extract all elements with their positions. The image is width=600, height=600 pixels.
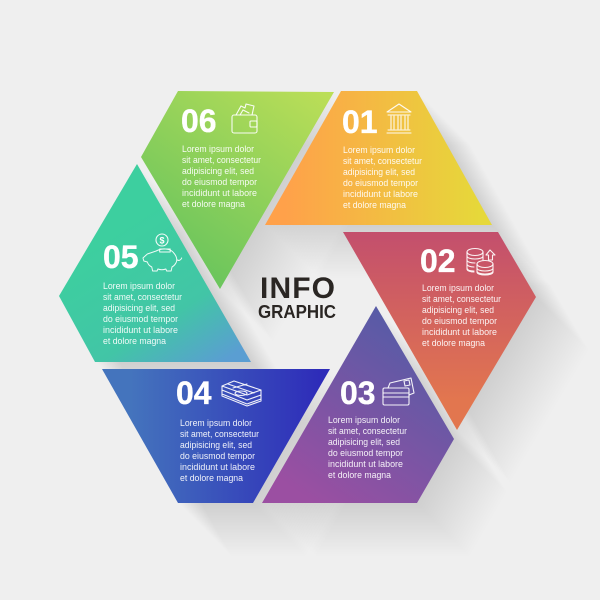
text 01: sit amet, consectetur [343, 156, 423, 167]
text 05: adipisicing elit, sed [103, 303, 175, 314]
center title: GRAPHIC [258, 302, 336, 322]
text 04: do eiusmod tempor [180, 451, 256, 462]
text 04: Lorem ipsum dolor [180, 418, 253, 429]
text 02: sit amet, consectetur [422, 294, 502, 305]
text 03: do eiusmod tempor [328, 448, 404, 459]
text 01: adipisicing elit, sed [343, 167, 415, 178]
text 06: Lorem ipsum dolor [182, 144, 255, 155]
dollar sign: $ [159, 236, 165, 246]
text 01 [343, 145, 423, 211]
text 02: adipisicing elit, sed [422, 305, 494, 316]
number 05: 05 [103, 239, 139, 275]
text 05: do eiusmod tempor [103, 314, 179, 325]
text 06 [182, 144, 262, 210]
icon: wallet [232, 104, 257, 133]
text 04: adipisicing elit, sed [180, 440, 252, 451]
panel 04 [102, 369, 330, 503]
text 03: adipisicing elit, sed [328, 437, 400, 448]
text 04 [180, 418, 260, 484]
text 06: incididunt ut labore [182, 188, 257, 199]
text 02: et dolore magna [422, 338, 486, 349]
text 06: adipisicing elit, sed [182, 166, 254, 177]
text 06: et dolore magna [182, 199, 246, 210]
center title: INFO [260, 272, 335, 305]
text 04: sit amet, consectetur [180, 429, 260, 440]
icon: coins [467, 248, 495, 275]
panel 03 [262, 306, 454, 503]
center title [258, 272, 336, 322]
text 03: sit amet, consectetur [328, 426, 408, 437]
text 05: sit amet, consectetur [103, 292, 183, 303]
text 05 [103, 281, 183, 347]
text 01: incididunt ut labore [343, 189, 418, 200]
long shadows [59, 91, 589, 556]
icon: banknotes [222, 381, 261, 406]
text 01: Lorem ipsum dolor [343, 145, 416, 156]
number 04: 04 [176, 375, 212, 411]
number 06: 06 [181, 103, 217, 139]
text 03: Lorem ipsum dolor [328, 415, 401, 426]
panel 02 [343, 232, 536, 430]
number 03: 03 [340, 375, 376, 411]
panel 05 [59, 164, 251, 362]
text 05: Lorem ipsum dolor [103, 281, 176, 292]
icon: credit cards [383, 378, 414, 405]
text 03 [328, 415, 408, 481]
number 02: 02 [420, 243, 456, 279]
icon: piggy bank [143, 234, 182, 271]
text 05: et dolore magna [103, 336, 167, 347]
text 01: et dolore magna [343, 200, 407, 211]
text 05: incididunt ut labore [103, 325, 178, 336]
panel 06 [141, 91, 334, 289]
panel 01 [265, 91, 492, 225]
text 01: do eiusmod tempor [343, 178, 419, 189]
number 01: 01 [342, 104, 378, 140]
text 02: do eiusmod tempor [422, 316, 498, 327]
text 02: incididunt ut labore [422, 327, 497, 338]
text 06: do eiusmod tempor [182, 177, 258, 188]
text 06: sit amet, consectetur [182, 155, 262, 166]
text 02 [422, 283, 502, 349]
text 02: Lorem ipsum dolor [422, 283, 495, 294]
text 04: incididunt ut labore [180, 462, 255, 473]
text 03: et dolore magna [328, 470, 392, 481]
icon: bank [387, 104, 411, 133]
text 03: incididunt ut labore [328, 459, 403, 470]
text 04: et dolore magna [180, 473, 244, 484]
